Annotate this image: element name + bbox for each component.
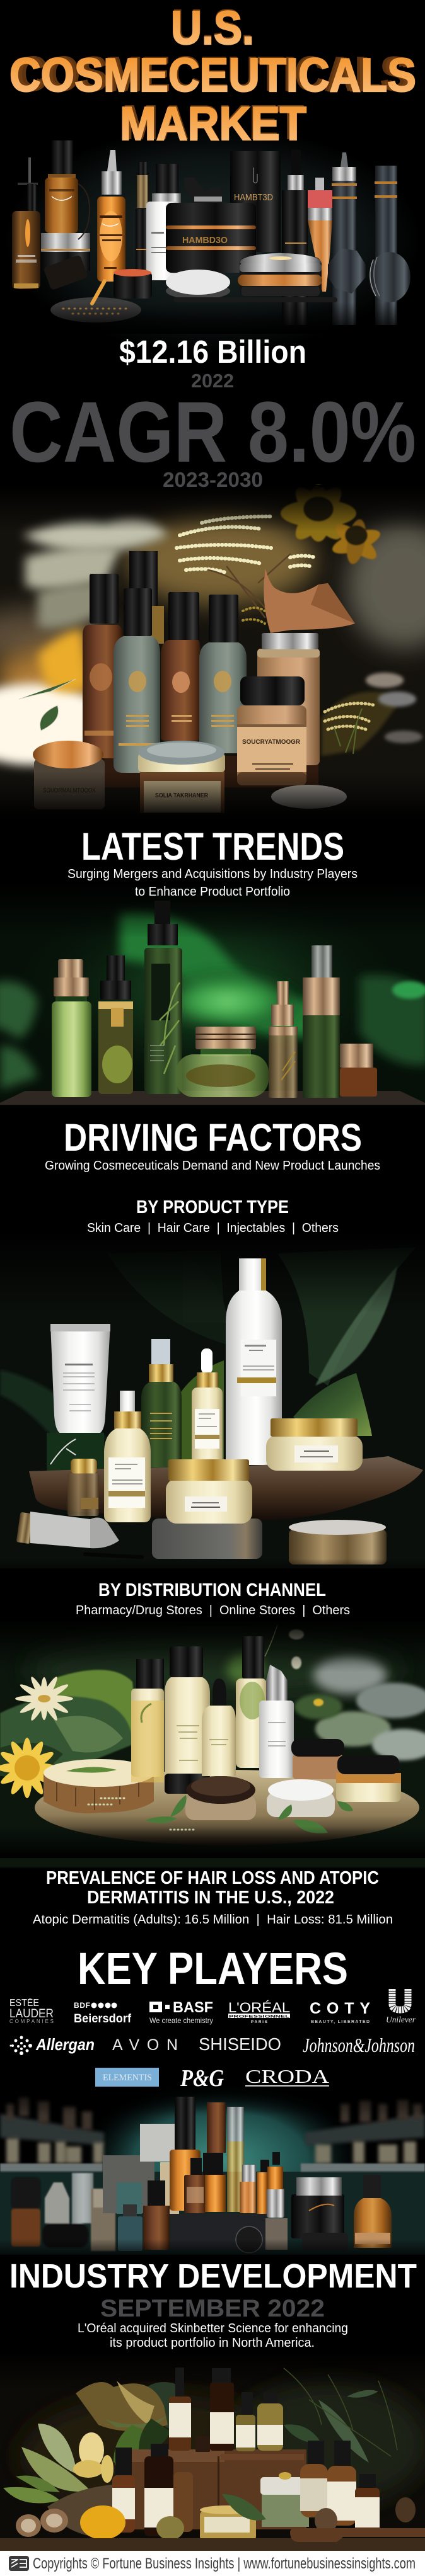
black-lid amber jar left [291,1739,344,1779]
logo: Estee Lauder: LAUDER [9,2007,54,2020]
front brown bottle [143,2180,170,2250]
development date: SEPTEMBER 2022 [100,2295,325,2322]
prevalence heading [46,1868,379,1908]
yellow petals [73,2419,170,2483]
dark slim bottle two [375,166,397,325]
trend description: Surging Mergers and Acquisitions by Industry Players [67,867,358,881]
dark block [302,2233,348,2251]
grey pedestal [152,1519,262,1559]
green glass jar [176,1027,269,1097]
dark slim bottle one [332,152,357,325]
cream dropper bottle [104,1391,151,1522]
white compact [166,270,230,299]
white product box [140,2124,175,2162]
cream box [265,2218,288,2250]
title line: U.S.: U.S. [171,1,254,54]
front dropper left [112,2448,135,2533]
large white bottle black cap [165,1646,210,1794]
cork brush [173,2472,193,2532]
black-lid amber jar right [336,1755,401,1802]
logo: Unilever: Unilever [386,2015,416,2025]
floral image fades [0,485,425,819]
tall white bottle [226,1258,282,1465]
honey jar [200,2494,266,2542]
dried bouquet [322,673,422,756]
pump bottle yellow [131,1659,164,1782]
footer logo [9,2556,29,2571]
logo: Beiersdorf: Beiersdorf [74,2012,132,2026]
right dropper bottles [300,2441,380,2534]
front dark bottle [144,2444,173,2536]
tall black box: HAMBT3D [234,192,273,203]
bronze spray bottle small [269,981,298,1098]
sage bottle right [199,595,247,753]
panel: industry development [9,2257,417,2350]
green bottle with gold pump [52,959,91,1097]
stone slab [29,1456,423,1520]
large black jar with gold bands: HAMBD3O [182,235,228,246]
coconut fiber [395,2497,416,2522]
panel: driving factors [45,1116,380,1173]
copper lid jar [33,741,105,809]
logo: P&G: P&G [180,2065,224,2092]
sage jar with white lid [260,2472,309,2527]
title line: MARKET: MARKET [120,97,306,150]
wooden board [290,2528,425,2542]
small dark jar [67,1459,99,1516]
round sponge [156,2516,184,2540]
pump head [184,178,222,204]
logo: Allergan: Allergan [35,2035,95,2054]
wooden shelf [0,1091,425,1105]
panel: latest trends [0,825,425,1120]
silver tin [238,253,322,296]
title line: MARKET: MARKET [122,96,304,149]
product floor fade [0,1559,425,1578]
panel: by product type image [0,1231,425,1578]
left shelf bottles [11,2173,115,2251]
copper jar stack [41,233,90,271]
black octagon puff [328,248,366,294]
logo: Estee Lauder: ESTĒE [9,1997,39,2009]
panel: hero products [0,126,425,353]
prevalence heading: DERMATITIS IN THE U.S., 2022 [87,1888,334,1908]
heading: by product type: BY PRODUCT TYPE [136,1197,289,1217]
tall green-bronze bottle [303,945,340,1098]
orange bottle large [170,2150,201,2211]
heading: by product type [87,1197,339,1235]
brush handle [44,254,337,302]
dotted tray [50,281,141,322]
white jar [267,1779,335,1817]
logo: L'Oreal Professionnel [228,2000,290,2024]
heading: latest trends: LATEST TRENDS [81,825,344,868]
panel: botanical products image [0,1619,425,1867]
heading: by distribution channel: BY DISTRIBUTION CHANNEL [98,1580,326,1600]
logo: L'Oreal Professionnel: PARIS [251,2020,267,2024]
amber bottle with black cap [45,140,90,239]
back tall amber bottle [210,2368,234,2451]
logo: Shiseido: SHISEIDO [199,2034,281,2054]
white flower [15,1675,73,1723]
logo: Beiersdorf: BDF [74,2001,90,2010]
panel: botanical apothecary image [0,2352,425,2551]
dark leaf background [0,1231,425,1568]
copper lid jar: SOUORMALMTOOOK [43,787,96,794]
small black jar [114,269,152,299]
heading: by distribution channel [76,1580,350,1617]
logo: Croda: CRODA [245,2065,330,2087]
dark bottle with silver collar [282,150,308,325]
logo: Allergan [10,2035,95,2055]
panel: key players [9,1944,416,2092]
logo: Estee Lauder [9,1997,54,2024]
shelf background [0,2078,425,2255]
cream bottle [160,2162,179,2214]
dried leaves in bowl [76,2381,168,2431]
trends fade [0,1104,425,1120]
logo: Beiersdorf [74,2001,132,2026]
dark plinth [170,2214,267,2250]
driving factor description: Growing Cosmeceuticals Demand and New Product Launches [45,1159,380,1173]
front cream jar [166,1459,252,1524]
glass orb [236,2226,262,2253]
green background [0,882,425,1105]
trend description [67,867,358,899]
tall black back bottle [175,2097,195,2153]
dropper bottle left [12,157,40,289]
amber bottle right [354,2175,392,2248]
back copper bottle [207,2102,226,2153]
lemon [80,2505,125,2539]
front tan jar [237,676,306,785]
title line: U.S.: U.S. [172,0,253,53]
slim dark bottle [136,162,149,271]
wooden crate [130,2449,306,2529]
ribbon [264,569,355,633]
logo: BASF: BASF [173,1999,213,2016]
hero fade [0,302,425,334]
logo: BASF [149,1999,213,2025]
market size year: 2022 [191,370,234,392]
front tan jar: SOUCRYATMOOGR [242,739,301,746]
back gold bottle [129,551,164,644]
foliage background [0,1619,425,1867]
clear bottle black pump [98,955,133,1094]
distribution list: Pharmacy/Drug Stores | Online Stores | Others [76,1604,350,1617]
logo: Elementis [95,2068,159,2087]
eucalyptus leaves [139,2368,397,2463]
small amber jar [340,1044,377,1097]
grey product box [103,2155,154,2213]
shelf fade [0,2239,425,2261]
back dropper bottle [169,2368,191,2451]
logo: Estee Lauder: COMPANIES [9,2019,54,2024]
white tube [50,1324,110,1434]
logo: L'Oreal Professionnel: PROFESSIONNEL [229,2014,289,2019]
logo: Avon: AVON [112,2036,178,2054]
pale lid jar: SOLIA TAKRHANER [155,792,209,799]
logo: L'Oreal Professionnel: L'ORÉAL [228,2000,290,2015]
wood log [44,1759,154,1813]
brown bottle middle [161,592,201,741]
apothecary background [0,2352,425,2551]
development description: its product portfolio in North America. [110,2336,315,2350]
logo: Elementis: ELEMENTIS [103,2073,152,2083]
sunflower [281,481,383,566]
wooden tray [104,756,318,787]
baby's breath flowers [177,516,315,624]
logo: Coty: COTY [310,2000,370,2017]
product type list: Skin Care | Hair Care | Injectables | Others [87,1221,339,1235]
brown bottle [83,574,122,758]
logo: BASF: We create chemistry [149,2016,213,2025]
dark green bottle [141,1339,182,1468]
panel: footer [0,2551,425,2576]
market size value: $12.16 Billion [119,334,306,370]
title [9,0,416,150]
gold narrow bottle [227,2141,244,2212]
back silver bottle [227,2107,244,2141]
pale green leaves [3,2424,91,2503]
back clear oil bottle [257,2392,283,2451]
floral background [0,485,425,819]
black jar silver lid [291,2177,344,2238]
right cream jar [266,1418,363,1471]
panel: prevalence statistics [33,1868,393,1927]
teal label box [117,2182,142,2214]
sage bottle left [114,588,160,773]
heading: driving factors: DRIVING FACTORS [64,1116,362,1159]
platter fade [0,1827,425,1858]
white bottle [146,164,181,280]
logo: Unilever [386,1989,416,2025]
applicator [83,1552,144,1559]
red cap copper tube [308,178,332,292]
center amber bottles group [184,2152,284,2218]
round disc [271,785,347,809]
pale lid jar [138,741,225,813]
prevalence values: Atopic Dermatitis (Adults): 16.5 Million | Hair Loss: 81.5 Million [33,1913,393,1927]
black round lid [369,252,410,302]
large black jar with gold bands [166,203,256,273]
wood root [315,2508,337,2533]
tall clear green bottle [144,901,182,1094]
bronze disc [289,1520,387,1564]
yellow flower [0,1738,57,1798]
tall black box [230,151,281,252]
teal bottle [118,2204,143,2251]
small pump bottle [195,2436,210,2452]
lying tube [16,1512,119,1548]
white pump bottle [259,1665,294,1778]
panel: pharmacy shelf image [0,2078,425,2261]
prevalence heading: PREVALENCE OF HAIR LOSS AND ATOPIC [46,1868,379,1888]
leaf [19,679,76,731]
dark lid jar [185,1776,256,1820]
bright amber serum bottle [97,150,125,282]
tall amber jar [257,633,320,765]
CAGR period: 2023-2030 [163,468,263,491]
root and shell [47,2484,148,2536]
logo: Coty: BEAUTY, LIBERATED [311,2020,370,2024]
heading: key players: KEY PLAYERS [78,1944,348,1994]
wooden platter [35,1770,419,1845]
nut halves [16,2509,68,2537]
trend description: to Enhance Product Portfolio [135,885,290,899]
back short bottle [236,2392,255,2451]
small dropper bottle [202,1678,236,1776]
marble block [47,1433,104,1472]
wooden table [0,2538,425,2551]
clear green-yellow bottle [236,1636,267,1768]
dropper serum [192,1348,223,1464]
development description: L'Oréal acquired Skinbetter Science for enhancing [78,2322,348,2335]
herb sprigs [88,1795,353,1833]
development description [78,2322,348,2350]
panel: floral bottles image [0,481,425,819]
